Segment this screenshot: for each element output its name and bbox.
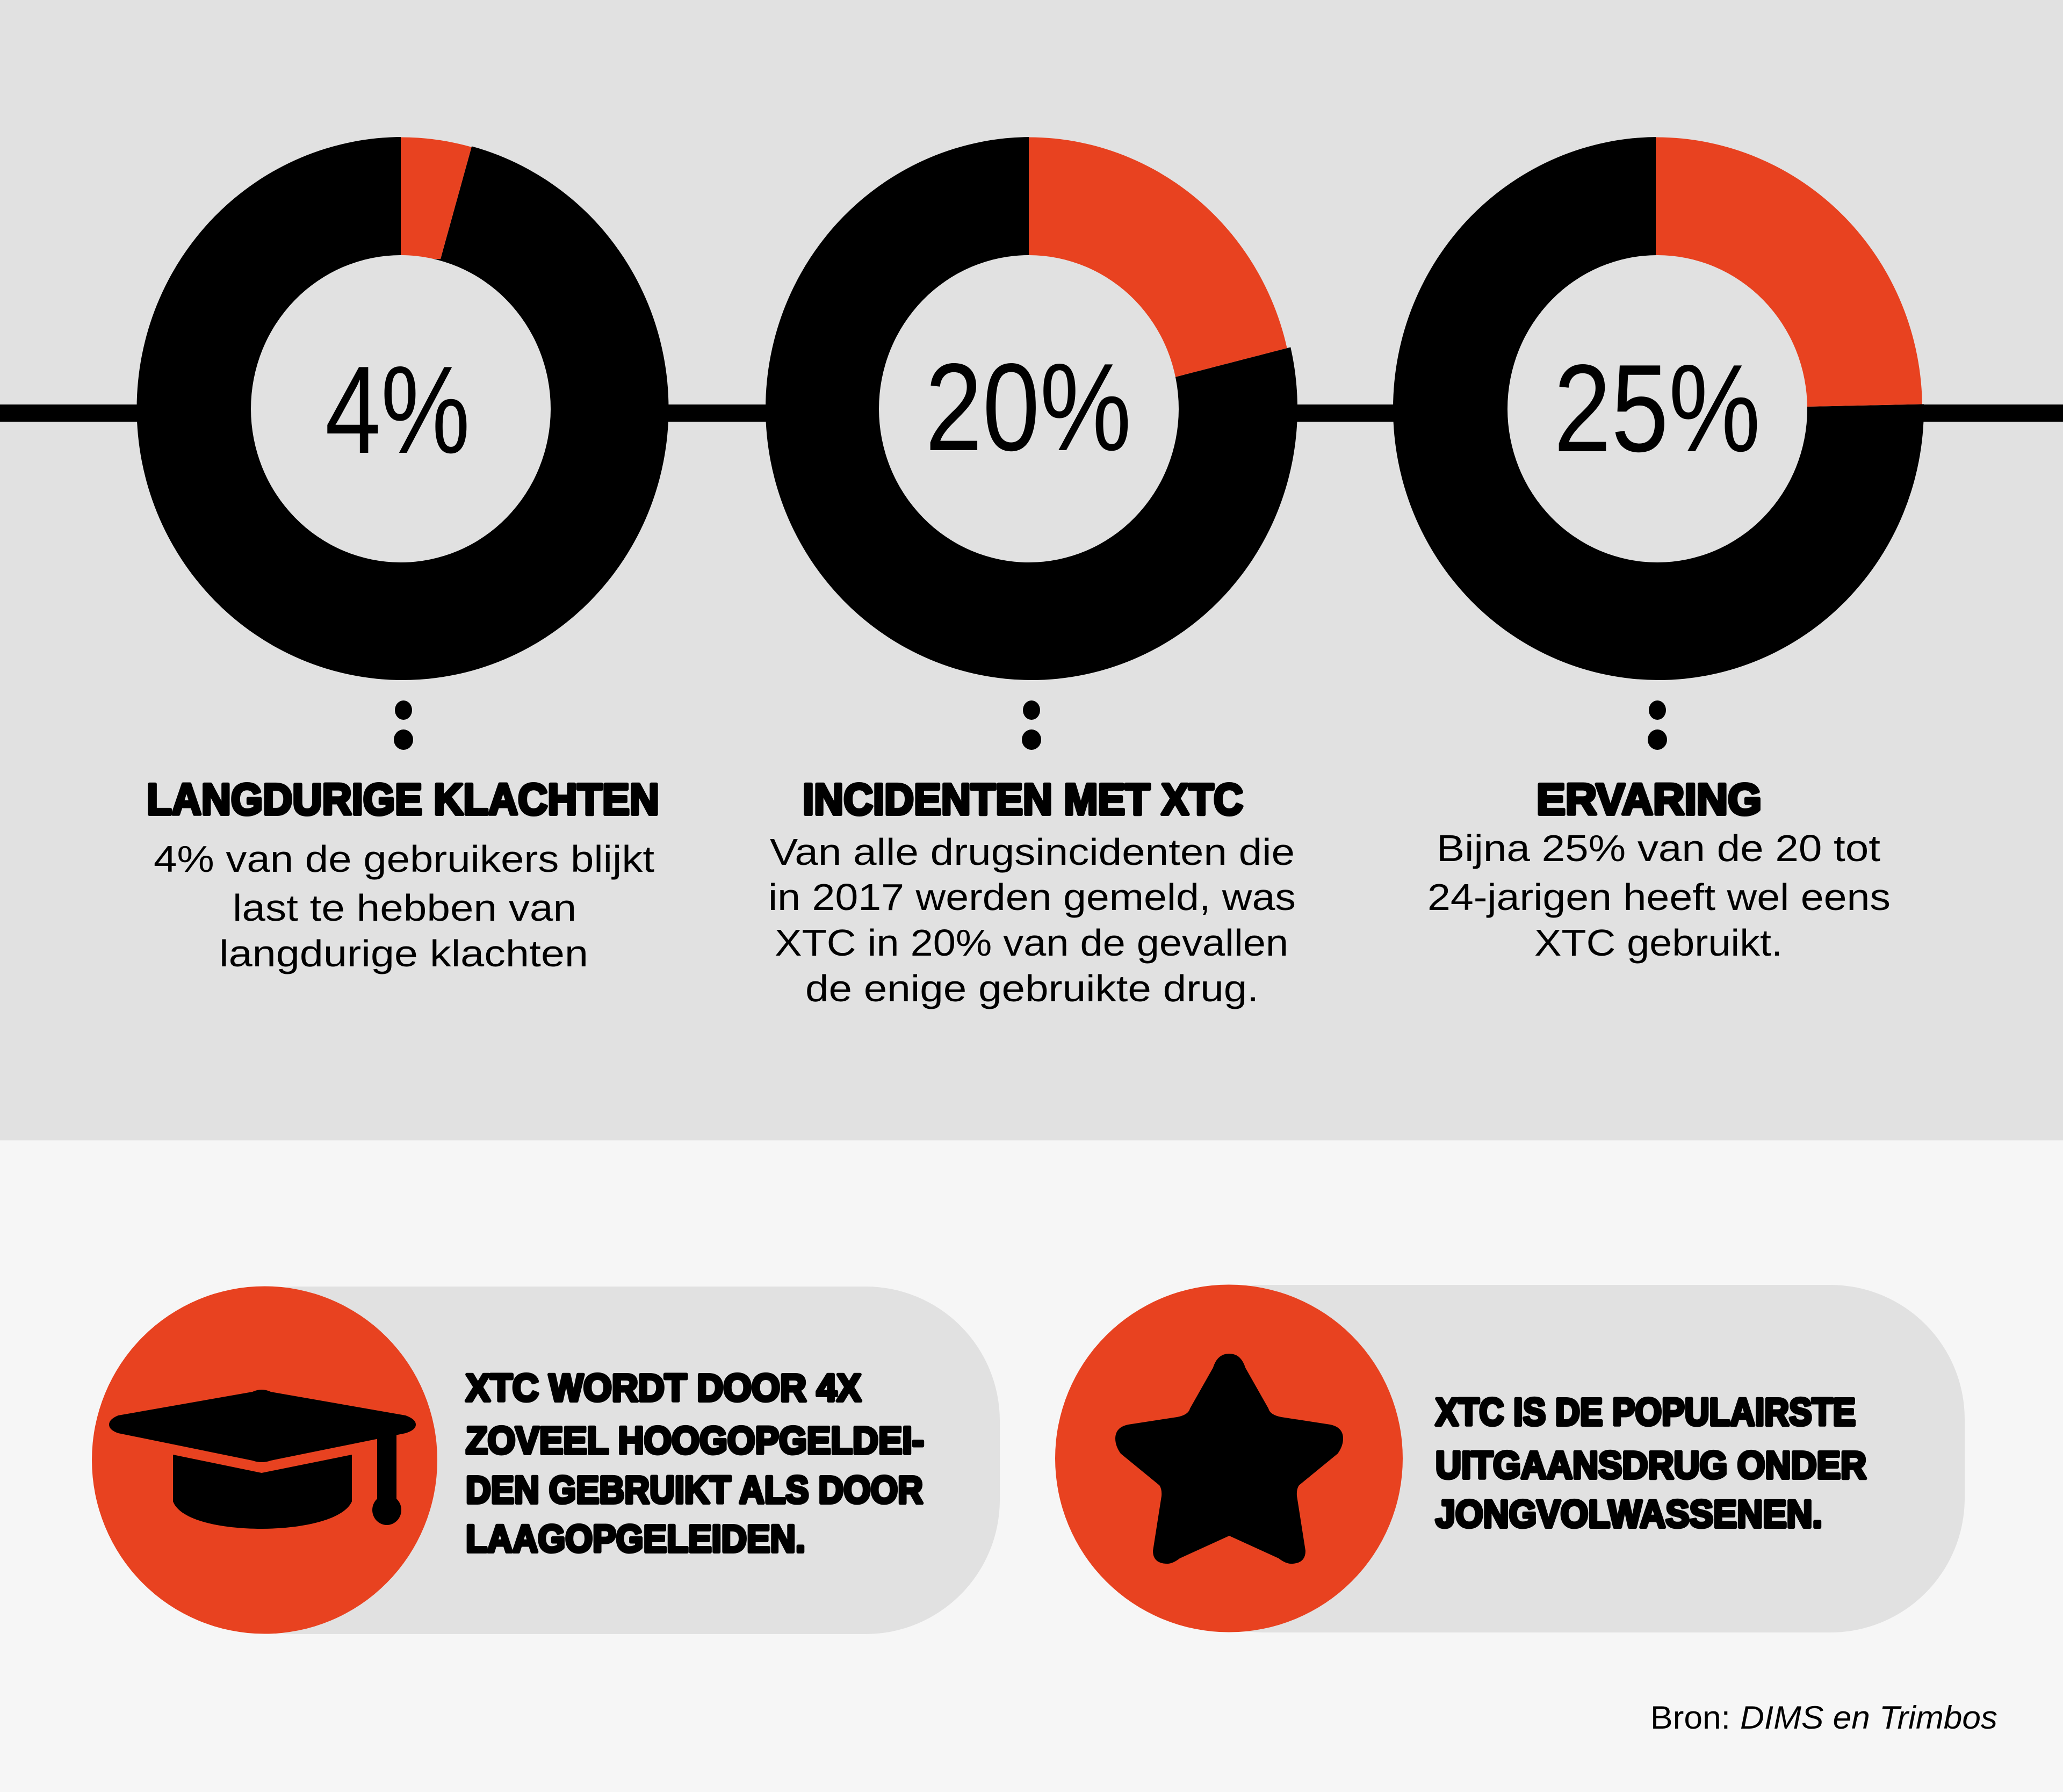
- text block: langdurige klachten: [154, 838, 654, 974]
- text block: incidenten met xtc: XTC in 20% van de gevallen: [775, 922, 1288, 964]
- dots: column 1: [394, 700, 413, 750]
- icon: star: [1115, 1354, 1343, 1564]
- text block: ervaring: [1427, 827, 1891, 964]
- text block: ervaring: 24-jarigen heeft wel eens: [1427, 876, 1891, 918]
- callout text: education: LAAGOPGELEIDEN.: [466, 1518, 805, 1560]
- text block: incidenten met xtc: in 2017 werden gemeld, was: [768, 876, 1296, 918]
- donut chart: 4%: 4%: [325, 341, 470, 480]
- panel: lower background: [0, 1140, 2063, 1792]
- text block: ervaring: Bijna 25% van de 20 tot: [1437, 827, 1880, 869]
- text block: langdurige klachten: langdurige klachten: [219, 933, 588, 974]
- dots: column 3: [1648, 700, 1667, 750]
- donut chart: 20%: 20%: [925, 338, 1131, 477]
- icon circle: popularity: [1055, 1285, 1403, 1632]
- text block: langdurige klachten: 4% van de gebruikers blijkt: [154, 838, 654, 880]
- icon circle: education: [92, 1286, 437, 1634]
- icon: graduation cap: [109, 1390, 416, 1529]
- source note: Bron:: [1650, 1700, 1730, 1736]
- panel: callout education: [92, 1286, 1000, 1634]
- donut chart: 4%: [136, 129, 668, 680]
- callout text: education: ZOVEEL HOOGOPGELDEI-: [466, 1420, 924, 1462]
- heading: ervaring: ERVARING: [1537, 775, 1762, 824]
- heading: langdurige klachten: LANGDURIGE KLACHTEN: [147, 775, 659, 824]
- panel: statistics background: [0, 0, 2063, 1140]
- panel: callout popularity: [1055, 1285, 1965, 1632]
- donut chart: 20%: [766, 129, 1316, 680]
- heading: incidenten met xtc: INCIDENTEN MET XTC: [803, 775, 1243, 824]
- callout text: popularity: UITGAANSDRUG ONDER: [1436, 1444, 1866, 1487]
- callout text: education: XTC WORDT DOOR 4X: [466, 1367, 861, 1410]
- callout text: education: [466, 1367, 924, 1560]
- text block: langdurige klachten: last te hebben van: [233, 887, 576, 929]
- callout text: popularity: JONGVOLWASSENEN.: [1436, 1493, 1822, 1536]
- callout text: education: DEN GEBRUIKT ALS DOOR: [466, 1469, 923, 1512]
- callout text: popularity: XTC IS DE POPULAIRSTE: [1436, 1391, 1856, 1434]
- text block: incidenten met xtc: de enige gebruikte drug.: [805, 967, 1259, 1009]
- callout text: popularity: [1436, 1391, 1866, 1536]
- dots: column 2: [1022, 700, 1041, 750]
- source note: DIMS en Trimbos: [1740, 1700, 1997, 1736]
- connecting line: [0, 404, 2063, 422]
- donut chart: 25%: 25%: [1554, 339, 1761, 478]
- text block: ervaring: XTC gebruikt.: [1534, 922, 1783, 964]
- donut chart: 25%: [1393, 129, 1934, 680]
- text block: incidenten met xtc: Van alle drugsincidenten die: [770, 831, 1295, 873]
- text block: incidenten met xtc: [768, 831, 1296, 1009]
